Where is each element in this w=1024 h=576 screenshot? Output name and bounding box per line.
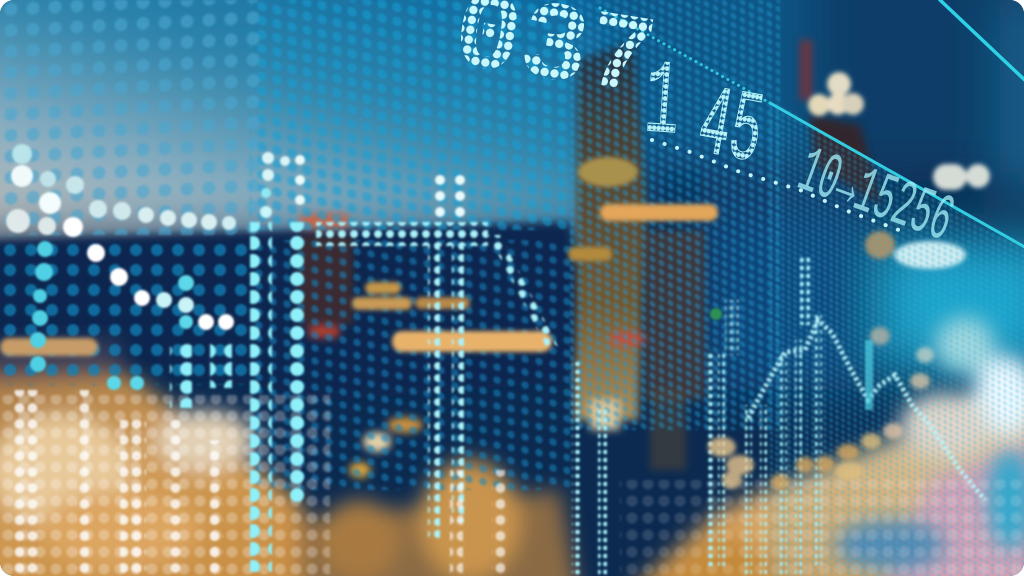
ticker line	[600, 0, 1024, 250]
blurred tower and city lights	[298, 40, 882, 478]
ticker numbers: 1 45: 1	[641, 43, 684, 165]
bright dots in left sky	[6, 144, 465, 390]
ticker numbers: 1 45	[641, 43, 771, 190]
bokeh lights bottom right	[708, 347, 934, 490]
line chart	[707, 255, 985, 575]
orange blurred light bars	[0, 157, 718, 356]
bright dot columns over city	[14, 222, 607, 576]
ticker numbers: 10→15256: 10→15256	[788, 135, 962, 259]
bokeh street lights top right	[808, 72, 990, 345]
ticker numbers: 1 45: 45	[690, 68, 771, 190]
